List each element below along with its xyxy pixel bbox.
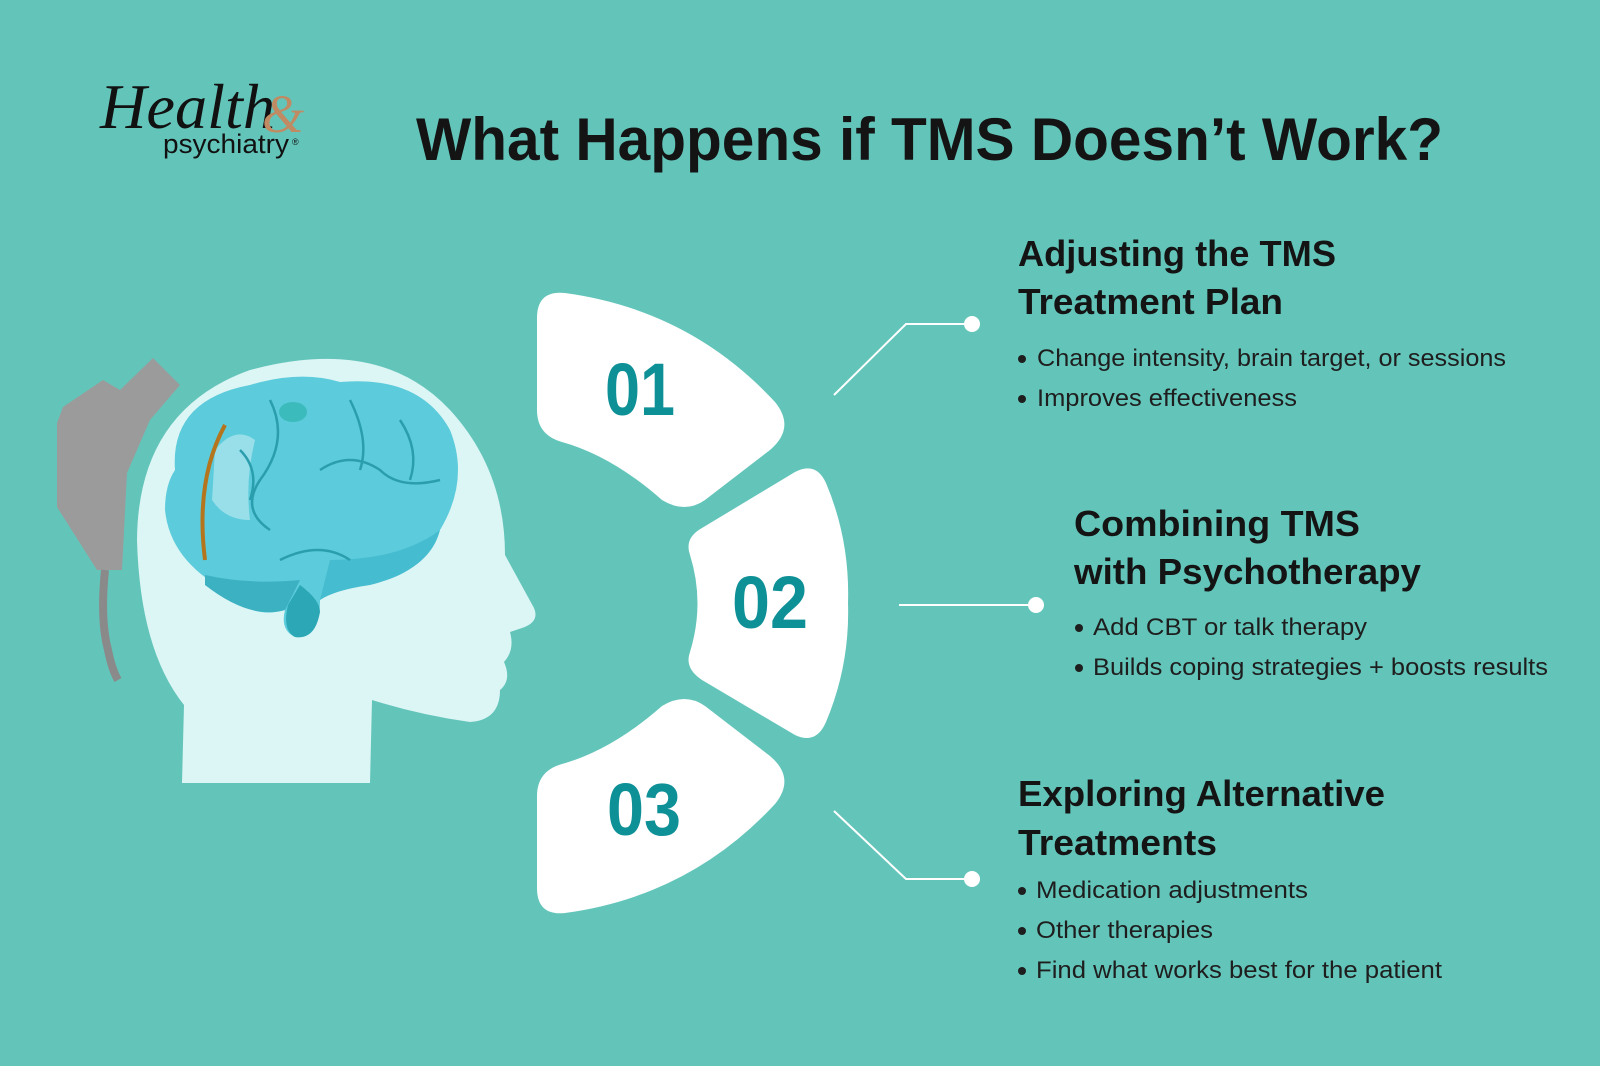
shape 03: 03 [607,768,681,851]
logo: ® [292,137,299,147]
title: What Happens if TMS Doesn’t Work? [416,106,1443,173]
text block 3 [1018,773,1442,984]
arrow: connector 2 [899,597,1044,613]
arrow: connector 3 [834,811,980,887]
arrow: connector 1 [834,316,980,395]
shape 02 [688,468,848,738]
text block 2: Add CBT or talk therapy [1093,614,1367,641]
text block 2 [1073,503,1548,681]
logo: Health [99,71,275,142]
logo: psychiatry [163,129,290,159]
text block 1 [1018,233,1506,412]
shape 03 [537,699,784,913]
icon: TMS device [57,358,180,680]
text block 1: Improves effectiveness [1037,385,1297,412]
text block 1: Adjusting the TMS [1018,233,1336,274]
text block 3: Find what works best for the patient [1036,957,1442,984]
text block 3: Treatments [1018,822,1217,863]
text block 2: Combining TMS [1074,503,1360,544]
text block 2: with Psychotherapy [1073,551,1421,592]
shape 01 [537,293,784,507]
shape 02: 02 [732,561,808,644]
text block 1: Treatment Plan [1018,281,1283,322]
text block 3: Other therapies [1036,917,1213,944]
text block 1: Change intensity, brain target, or sessions [1037,345,1506,372]
text block 2: Builds coping strategies + boosts results [1093,654,1548,681]
icon: head with brain [137,359,536,783]
logo: & [262,84,304,144]
text block 3: Exploring Alternative [1018,773,1385,814]
shape 01: 01 [605,348,675,431]
logo [99,71,304,159]
text block 3: Medication adjustments [1036,877,1308,904]
